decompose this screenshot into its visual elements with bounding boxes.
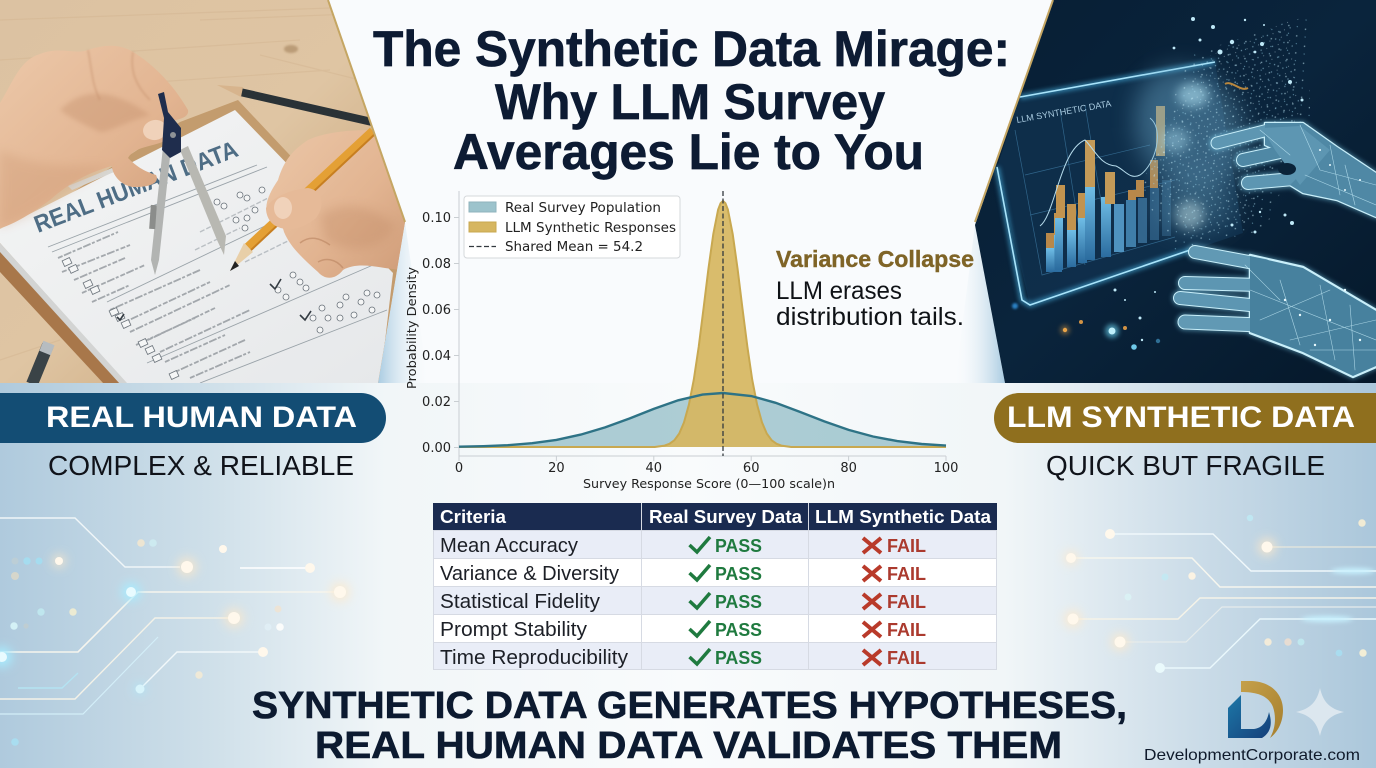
row: variance and diversity: FAIL bbox=[887, 564, 926, 584]
icon: back pencil bbox=[217, 85, 372, 122]
real curve line bbox=[459, 393, 946, 447]
banner: real human data: REAL HUMAN DATA bbox=[46, 401, 357, 434]
tablet bar chart bbox=[1040, 106, 1171, 272]
title bbox=[373, 21, 1010, 180]
icon: thumb over pencil bbox=[266, 188, 316, 228]
table row backgrounds bbox=[433, 503, 997, 670]
glow wedge: left of chart bbox=[378, 222, 428, 383]
x axis labels: 20 bbox=[548, 461, 565, 476]
annotation: variance collapse: Variance Collapse bbox=[776, 246, 974, 272]
icon: left hand bbox=[0, 46, 188, 228]
title: Why LLM Survey bbox=[495, 74, 885, 130]
y axis title: Probability Density bbox=[404, 266, 419, 389]
closing statement: SYNTHETIC DATA GENERATES HYPOTHESES, bbox=[252, 685, 1127, 727]
table header: Real Survey Data bbox=[649, 507, 803, 527]
circuit decoration: right bbox=[1064, 515, 1376, 673]
icon: pen at edge bbox=[32, 343, 49, 384]
LLM synthetic curve bbox=[459, 201, 946, 447]
y axis labels: 0.06 bbox=[422, 303, 451, 318]
icon: orange pencil bbox=[230, 131, 375, 271]
row: time reproducibility: Time Reproducibility bbox=[440, 647, 628, 669]
banner: LLM synthetic data bbox=[994, 393, 1376, 443]
row: time reproducibility: PASS bbox=[715, 648, 762, 668]
y axis labels: 0.00 bbox=[422, 441, 451, 456]
subtitle: complex and reliable: COMPLEX & RELIABLE bbox=[48, 450, 354, 481]
tablet labels: LLM SYNTHETIC DATA bbox=[1016, 98, 1112, 125]
banner: LLM synthetic data: LLM SYNTHETIC DATA bbox=[1007, 401, 1355, 434]
icon: D mark bbox=[1228, 681, 1283, 738]
real population curve bbox=[459, 393, 946, 447]
x axis labels: 40 bbox=[646, 461, 662, 476]
comparison table bbox=[433, 503, 997, 670]
photo divider: right gold line bbox=[975, 0, 1053, 222]
chart legend: Shared Mean = 54.2 bbox=[505, 240, 643, 255]
row: statistical fidelity: PASS bbox=[715, 592, 762, 612]
x axis labels: 100 bbox=[934, 461, 958, 476]
answer boxes bbox=[62, 187, 380, 379]
chart legend: Real Survey Population bbox=[505, 201, 661, 216]
photo divider: left gold line bbox=[328, 0, 405, 222]
y axis labels bbox=[422, 211, 451, 456]
x axis labels: 80 bbox=[840, 461, 857, 476]
table header: LLM Synthetic Data bbox=[815, 507, 992, 527]
annotation: variance collapse: distribution tails. bbox=[776, 303, 964, 331]
annotation: variance collapse bbox=[776, 246, 974, 331]
row: time reproducibility bbox=[440, 647, 926, 669]
chart axes bbox=[454, 191, 946, 461]
shared mean line bbox=[722, 191, 724, 456]
logo wordmark: DevelopmentCorporate.com bbox=[1144, 747, 1360, 764]
row: time reproducibility: FAIL bbox=[887, 648, 926, 668]
logo: DevelopmentCorporate bbox=[1144, 681, 1360, 764]
row: prompt stability: PASS bbox=[715, 620, 762, 640]
icon: sparkle star bbox=[1296, 688, 1344, 736]
photo panel: real human data survey bbox=[0, 0, 410, 384]
centre title panel background bbox=[328, 0, 1053, 383]
icon: lower wireframe hand bbox=[1180, 252, 1376, 377]
row: statistical fidelity: FAIL bbox=[887, 592, 926, 612]
row: statistical fidelity bbox=[440, 591, 926, 613]
row: prompt stability bbox=[440, 619, 926, 641]
photo panel: LLM synthetic data tablet bbox=[970, 0, 1376, 384]
row: mean accuracy: Mean Accuracy bbox=[440, 535, 578, 557]
row: prompt stability: FAIL bbox=[887, 620, 926, 640]
banner: real human data bbox=[0, 393, 386, 443]
row: variance and diversity: Variance & Diversity bbox=[440, 563, 619, 585]
glowing lights bbox=[1012, 303, 1160, 350]
row: mean accuracy bbox=[440, 535, 926, 557]
x axis labels: 60 bbox=[743, 461, 759, 476]
density chart bbox=[404, 191, 958, 491]
icon: compass bbox=[149, 92, 226, 275]
y axis labels: 0.02 bbox=[422, 395, 451, 410]
circuit decoration: left bbox=[0, 518, 350, 746]
clip metal bbox=[68, 168, 114, 190]
particle dissolve cloud bbox=[1112, 15, 1310, 341]
subtitle: quick but fragile: QUICK BUT FRAGILE bbox=[1046, 450, 1325, 481]
table header: Criteria bbox=[440, 507, 507, 527]
x axis labels: 0 bbox=[455, 461, 463, 476]
icon: upper wireframe hand bbox=[1217, 123, 1376, 217]
survey paper sheet bbox=[0, 110, 393, 384]
clipboard bbox=[0, 100, 398, 384]
title: The Synthetic Data Mirage: bbox=[373, 21, 1010, 77]
form lines and questions bbox=[48, 165, 387, 383]
icon: right hand bbox=[266, 120, 405, 278]
chart legend: LLM Synthetic Responses bbox=[505, 221, 676, 236]
row: mean accuracy: PASS bbox=[715, 536, 762, 556]
row: prompt stability: Prompt Stability bbox=[440, 619, 587, 641]
row: variance and diversity: PASS bbox=[715, 564, 762, 584]
x axis title: Survey Response Score (0—100 scale)n bbox=[583, 476, 835, 491]
x axis labels bbox=[455, 461, 958, 476]
glow wedge: right of chart bbox=[955, 225, 1005, 383]
y axis labels: 0.04 bbox=[422, 349, 451, 364]
y axis labels: 0.08 bbox=[422, 257, 451, 272]
chart legend bbox=[464, 196, 680, 258]
row: mean accuracy: FAIL bbox=[887, 536, 926, 556]
row: statistical fidelity: Statistical Fidelity bbox=[440, 591, 600, 613]
sheet heading text: REAL HUMAN DATA bbox=[30, 136, 242, 239]
y axis labels: 0.10 bbox=[422, 211, 451, 226]
tablet screen bbox=[997, 62, 1243, 305]
annotation: variance collapse: LLM erases bbox=[776, 277, 902, 305]
title: Averages Lie to You bbox=[453, 124, 924, 180]
row: variance and diversity bbox=[440, 563, 926, 585]
closing statement: REAL HUMAN DATA VALIDATES THEM bbox=[315, 725, 1062, 767]
closing statement bbox=[252, 685, 1127, 767]
table header bbox=[433, 503, 997, 530]
